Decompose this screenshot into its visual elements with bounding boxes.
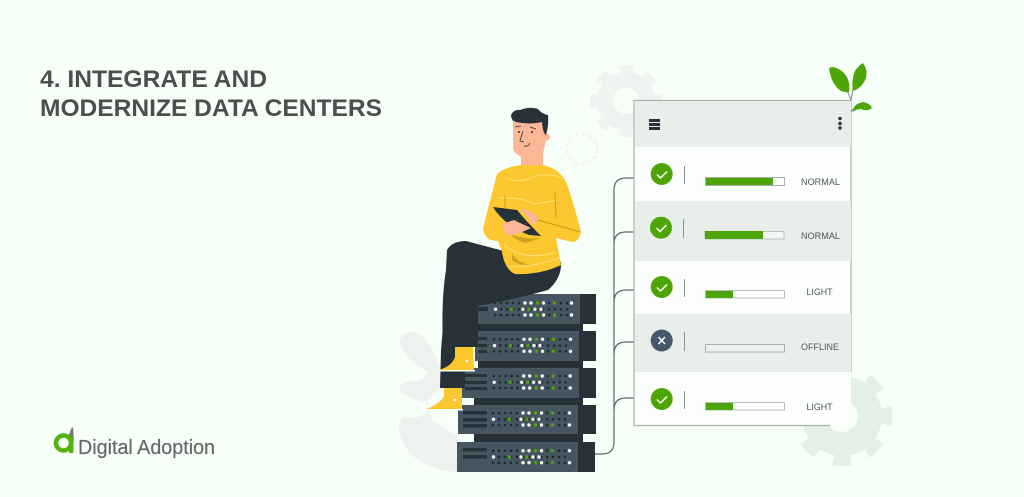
row 4: offline: OFFLINE	[801, 342, 839, 352]
logo: Digital Adoption: Digital Adoption	[78, 437, 215, 459]
server unit 1	[475, 294, 596, 324]
title	[40, 66, 382, 122]
sweater	[483, 165, 581, 274]
face	[513, 122, 546, 158]
facial features	[515, 126, 536, 146]
back leg	[440, 290, 478, 388]
title: 4. INTEGRATE AND	[40, 66, 267, 93]
panel header	[635, 101, 851, 147]
tablet	[493, 207, 541, 236]
faint outline gear	[567, 134, 597, 164]
server unit 5	[457, 442, 595, 472]
eyes	[518, 131, 533, 133]
hair	[511, 108, 548, 135]
back shoe	[426, 388, 463, 410]
background leaf plant	[399, 332, 457, 472]
server rack	[457, 294, 596, 472]
logo: Digital Adoption	[56, 427, 215, 459]
background gear bottom	[798, 372, 886, 460]
row 2: normal	[650, 217, 840, 241]
hands	[502, 209, 539, 236]
neck	[521, 150, 543, 170]
row 1: normal	[651, 163, 840, 187]
row 5: light	[651, 388, 833, 412]
plant on panel	[829, 63, 872, 112]
front leg	[442, 241, 561, 347]
row 4: offline	[651, 330, 839, 352]
row 3: light: LIGHT	[806, 287, 833, 297]
title: MODERNIZE DATA CENTERS	[40, 95, 382, 122]
server unit 2	[475, 331, 596, 361]
row 2: normal: NORMAL	[801, 231, 840, 241]
server unit 4	[458, 405, 596, 434]
front shoe	[439, 347, 475, 372]
background gear top	[594, 69, 658, 133]
dashboard panel	[634, 100, 851, 426]
connector lines	[595, 178, 634, 454]
person	[426, 108, 581, 410]
row 1: normal: NORMAL	[801, 177, 840, 187]
server unit 3	[459, 368, 596, 398]
row 3: light	[651, 276, 833, 298]
row 5: light: LIGHT	[806, 402, 833, 412]
